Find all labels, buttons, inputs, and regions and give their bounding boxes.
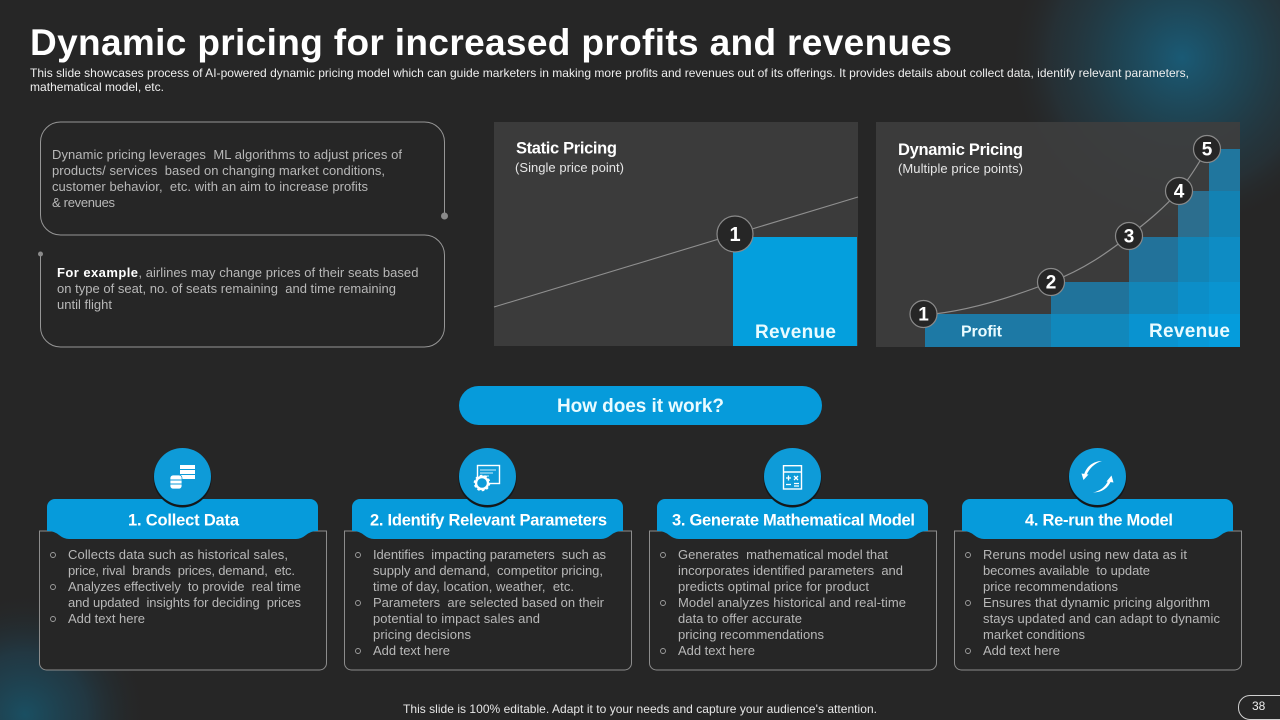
stepped revenue blocks xyxy=(925,149,1240,347)
static pricing subheading: (Single price point) xyxy=(515,160,624,175)
revenue label: Revenue xyxy=(1149,321,1230,342)
step 4 bullets: Reruns model using new data as it xyxy=(983,547,1187,562)
dynamic pricing heading: Dynamic Pricing xyxy=(898,141,1023,159)
panel: dynamic pricing definition: customer behavior, etc. with an aim to increase profits xyxy=(52,179,368,194)
price point 1 xyxy=(717,216,753,252)
profit label: Profit xyxy=(961,324,1003,340)
panel: dynamic pricing definition: & revenues xyxy=(52,195,116,210)
step 3 bullets: Add text here xyxy=(678,643,755,658)
step 1 bullets: and updated insights for deciding prices xyxy=(68,595,302,610)
subtitle description: This slide showcases process of AI-powered dynamic pricing model which can guide marketers in making more profits and revenues out of its offerings. It provides details about collect data, identify relevant parameters, xyxy=(30,66,1189,80)
price point 4 xyxy=(1166,178,1192,204)
price line xyxy=(494,197,858,307)
panel: airline example: on type of seat, no. of seats remaining and time remaining xyxy=(57,281,396,296)
step 2 bullets: supply and demand, competitor pricing, xyxy=(373,563,603,578)
subtitle description: mathematical model, etc. xyxy=(30,80,164,94)
page number: 38 xyxy=(1252,699,1266,713)
panel: step 2 identify relevant parameters xyxy=(344,448,632,670)
step 2 header: 2. Identify Relevant Parameters xyxy=(370,512,607,530)
step 3 bullets xyxy=(660,547,906,658)
step 1 bullets: price, rival brands prices, demand, etc. xyxy=(68,563,295,578)
panel: airline example xyxy=(38,235,444,347)
price point 2 xyxy=(1038,268,1064,296)
price point 5 xyxy=(1194,136,1220,162)
step 4 header: 4. Re-run the Model xyxy=(1025,512,1173,530)
step 3 bullets: Generates mathematical model that xyxy=(678,547,888,562)
price point 3 xyxy=(1116,222,1142,250)
step 2 bullets: Add text here xyxy=(373,643,450,658)
page number xyxy=(1238,696,1280,720)
step 3 bullets: Model analyzes historical and real-time xyxy=(678,595,906,610)
panel: dynamic pricing definition: Dynamic pricing leverages ML algorithms to adjust prices of xyxy=(52,147,402,162)
step 1 bullets xyxy=(50,547,302,626)
how does it work pill: How does it work? xyxy=(557,396,724,417)
step 2 bullets: time of day, location, weather, etc. xyxy=(373,579,574,594)
step 3 header xyxy=(657,499,928,539)
panel: step 3 generate mathematical model xyxy=(650,448,937,670)
step 1 bullets: Add text here xyxy=(68,611,145,626)
step 3 bullets: incorporates identified parameters and xyxy=(678,563,903,578)
step 4 bullets: stays updated and can adapt to dynamic xyxy=(983,611,1220,626)
revenue block xyxy=(733,237,857,346)
icon: calculator xyxy=(764,448,822,508)
step 4 bullets: becomes available to update xyxy=(983,563,1150,578)
step 2 bullets: pricing decisions xyxy=(373,627,472,642)
dynamic pricing subheading: (Multiple price points) xyxy=(898,161,1023,176)
step 1 bullets: Analyzes effectively to provide real time xyxy=(68,579,301,594)
step 4 bullets: Add text here xyxy=(983,643,1060,658)
panel: dynamic pricing definition: products/ services based on changing market conditions, xyxy=(52,163,385,178)
step 4 header xyxy=(962,499,1233,539)
step 4 bullets xyxy=(966,547,1220,658)
panel: step 1 collect data xyxy=(40,448,326,670)
icon: database xyxy=(154,448,212,508)
step 4 bullets: Ensures that dynamic pricing algorithm xyxy=(983,595,1210,610)
step 4 bullets: price recommendations xyxy=(983,579,1118,594)
price curve xyxy=(923,149,1207,315)
price point 3: 3 xyxy=(1124,226,1134,248)
step 3 bullets: data to offer accurate xyxy=(678,611,802,626)
price point 2: 2 xyxy=(1046,272,1056,294)
step 2 header xyxy=(352,499,623,539)
panel: airline example: until flight xyxy=(57,297,112,312)
price point 1 xyxy=(910,300,937,328)
icon: refresh arrows xyxy=(1068,448,1126,508)
price point 1: 1 xyxy=(729,224,741,246)
footer note: This slide is 100% editable. Adapt it to your needs and capture your audience's attention. xyxy=(403,702,877,716)
static pricing heading: Static Pricing xyxy=(516,140,617,158)
step 1 bullets: Collects data such as historical sales, xyxy=(68,547,288,562)
price point 4: 4 xyxy=(1174,182,1185,202)
step 1 header: 1. Collect Data xyxy=(128,512,240,530)
icon: monitor with gear xyxy=(458,448,516,508)
subtitle description xyxy=(30,66,1189,94)
step 2 bullets: potential to impact sales and xyxy=(373,611,540,626)
price point 5: 5 xyxy=(1202,140,1213,160)
step 3 bullets: predicts optimal price for product xyxy=(678,579,869,594)
panel: step 4 re-run the model xyxy=(954,448,1242,670)
step 3 bullets: pricing recommendations xyxy=(678,627,824,642)
panel: static pricing chart xyxy=(494,122,858,346)
step 2 bullets: Parameters are selected based on their xyxy=(373,595,605,610)
step 2 bullets xyxy=(356,547,606,658)
panel: airline example: For example, airlines may change prices of their seats based xyxy=(57,265,418,280)
price point 1: 1 xyxy=(918,304,929,326)
revenue label: Revenue xyxy=(755,322,836,343)
how does it work pill xyxy=(459,386,822,425)
step 2 bullets: Identifies impacting parameters such as xyxy=(373,547,606,562)
title: Dynamic pricing for increased profits and revenues xyxy=(30,22,952,63)
step 4 bullets: market conditions xyxy=(983,627,1086,642)
step 3 header: 3. Generate Mathematical Model xyxy=(672,512,915,530)
panel: dynamic pricing definition xyxy=(40,122,448,235)
panel: dynamic pricing chart xyxy=(876,122,1240,347)
step 1 header xyxy=(47,499,318,539)
